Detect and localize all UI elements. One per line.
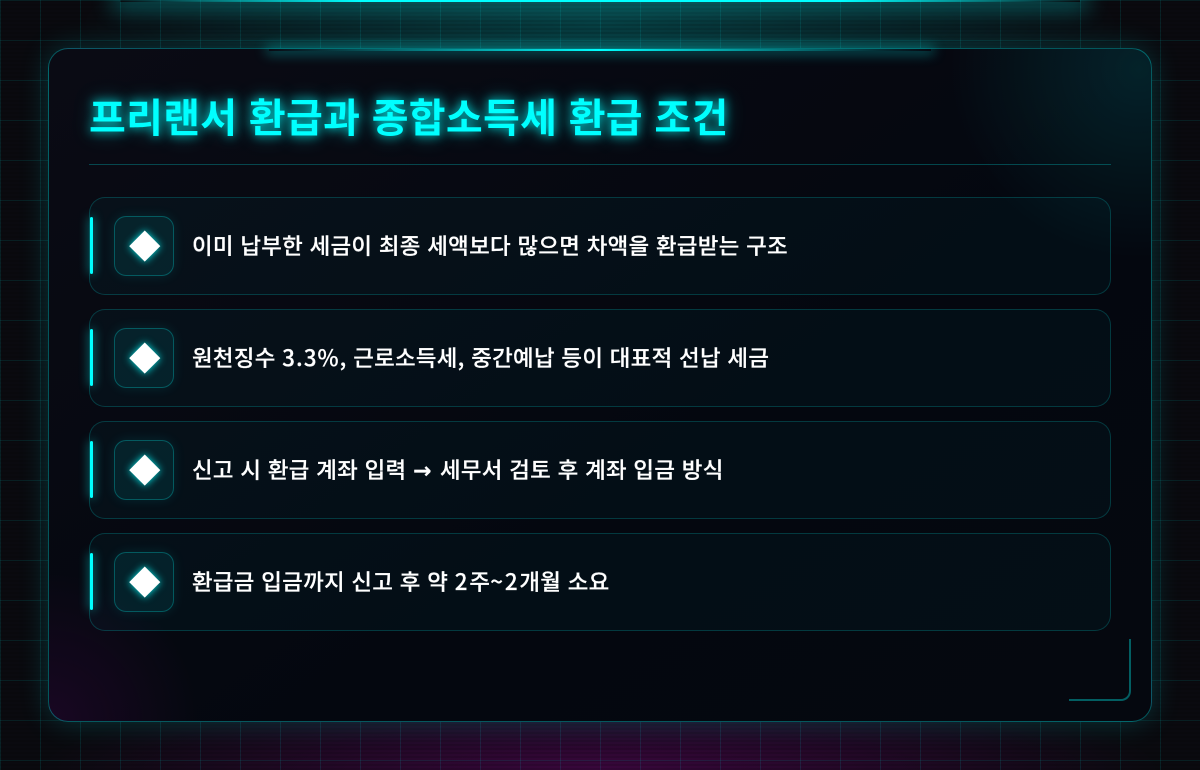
list item 3 [89,421,1111,519]
accent bar 1 [90,217,93,274]
list item 4 [89,533,1111,631]
top neon line [120,0,1080,2]
item text 4: 환급금 입금까지 신고 후 약 2주~2개월 소요 [192,565,610,597]
item text 1: 이미 납부한 세금이 최종 세액보다 많으면 차액을 환급받는 구조 [192,229,788,261]
list item 1 [89,197,1111,295]
item text 2: 원천징수 3.3%, 근로소득세, 중간예납 등이 대표적 선납 세금 [192,341,769,373]
accent bar 3 [90,441,93,498]
icon: diamond 4 [114,552,174,612]
corner bracket [1069,639,1131,701]
item text 3: 신고 시 환급 계좌 입력 → 세무서 검토 후 계좌 입금 방식 [192,453,724,485]
card top accent line [269,49,931,51]
accent bar 2 [90,329,93,386]
icon: diamond 2 [114,328,174,388]
accent bar 4 [90,553,93,610]
list item 2 [89,309,1111,407]
icon: diamond 1 [114,216,174,276]
title: 프리랜서 환급과 종합소득세 환급 조건 [89,86,729,144]
icon: diamond 3 [114,440,174,500]
